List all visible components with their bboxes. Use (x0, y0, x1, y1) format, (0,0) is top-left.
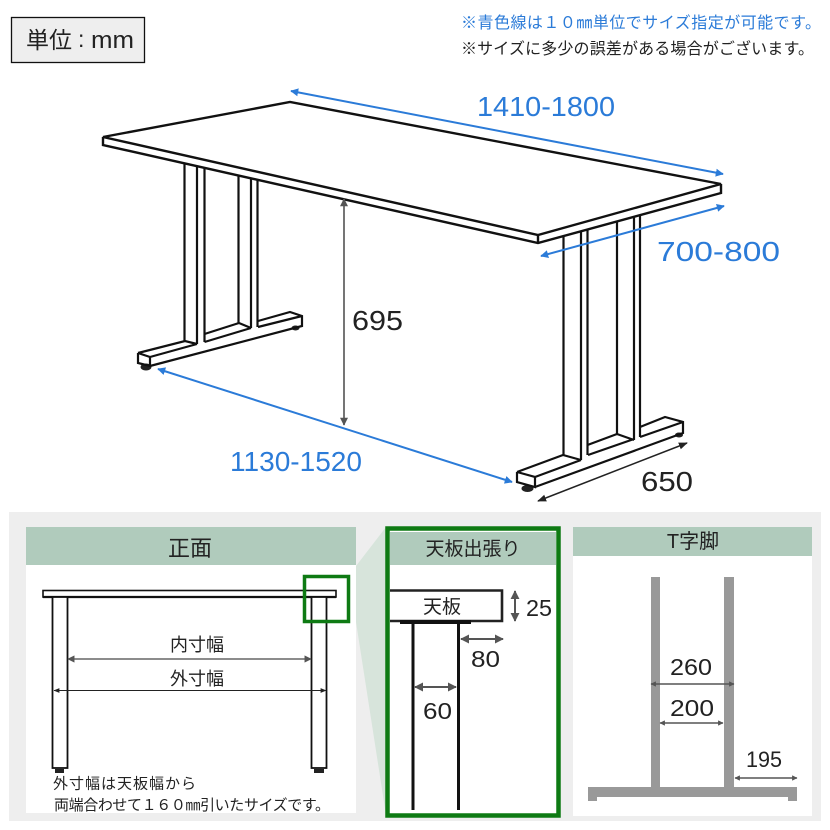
heading: top overhang: 天板出張り (425, 538, 521, 560)
right leg (517, 215, 683, 487)
dimension label: 695: 695 (352, 305, 403, 336)
unit label: mm (91, 27, 134, 54)
label: 260: 260 (670, 654, 712, 680)
right leg glides (522, 432, 683, 492)
dimension arrow: top length (291, 91, 723, 174)
label: 25: 25 (526, 595, 552, 621)
detail background band (9, 512, 821, 821)
dimension label: 1410-1800: 1410-1800 (477, 91, 615, 122)
tabletop section (390, 590, 502, 621)
arrow: 260 (651, 683, 734, 685)
dimension arrow: height (343, 199, 345, 425)
heading: T-shaped leg: T字脚 (667, 530, 719, 553)
panel: T-shaped leg (573, 527, 812, 816)
arrow: overhang (461, 638, 503, 640)
leg section (413, 624, 458, 810)
mounting plate (400, 620, 471, 624)
T leg drawing (588, 577, 797, 801)
panel: top overhang (388, 528, 558, 816)
heading: T-shaped leg (573, 527, 812, 556)
left leg (138, 163, 302, 366)
front table outline (43, 590, 336, 768)
arrow: outer width (54, 690, 326, 692)
note: outer width (53, 776, 330, 814)
arrow: thickness (514, 591, 516, 621)
dimension label: 700-800: 700-800 (657, 236, 780, 267)
note: blue line sizing: ※青色線は１０㎜単位でサイズ指定が可能です。 (461, 14, 821, 32)
arrow: 195 (735, 777, 797, 779)
dimension arrow: top depth (541, 206, 724, 256)
left leg glides (140, 326, 300, 370)
panel: front view (26, 527, 356, 814)
label: 80: 80 (471, 646, 500, 672)
unit label (12, 18, 144, 62)
note: size tolerance: ※サイズに多少の誤差がある場合がございます。 (461, 39, 814, 58)
note: outer width: 外寸幅は天板幅から (53, 776, 196, 792)
label: tabletop: 天板 (423, 596, 461, 618)
front glides (55, 769, 324, 773)
unit label: 単位 (26, 27, 72, 53)
heading: top overhang (390, 532, 556, 565)
label: outer width: 外寸幅 (170, 669, 224, 689)
label: inner width: 内寸幅 (170, 635, 224, 655)
label: 60: 60 (423, 698, 452, 724)
unit label: : (78, 26, 84, 52)
zoom highlight square (304, 576, 348, 622)
table top (103, 102, 721, 243)
label: 200: 200 (670, 695, 714, 721)
heading: front view: 正面 (168, 536, 212, 561)
dimension label: 650: 650 (641, 466, 693, 497)
dimension arrow: leg depth (538, 443, 687, 501)
table illustration (103, 102, 721, 492)
arrow: leg width (415, 686, 456, 688)
dimension label: 1130-1520: 1130-1520 (230, 446, 362, 477)
arrow: inner width (68, 658, 311, 660)
arrow: 200 (660, 722, 723, 724)
zoom connector (356, 527, 386, 815)
label: 195: 195 (746, 747, 782, 772)
dimension arrow: inner width (158, 369, 512, 482)
heading: front view (26, 527, 356, 565)
note: outer width: 両端合わせて１６０㎜引いたサイズです。 (54, 797, 330, 814)
